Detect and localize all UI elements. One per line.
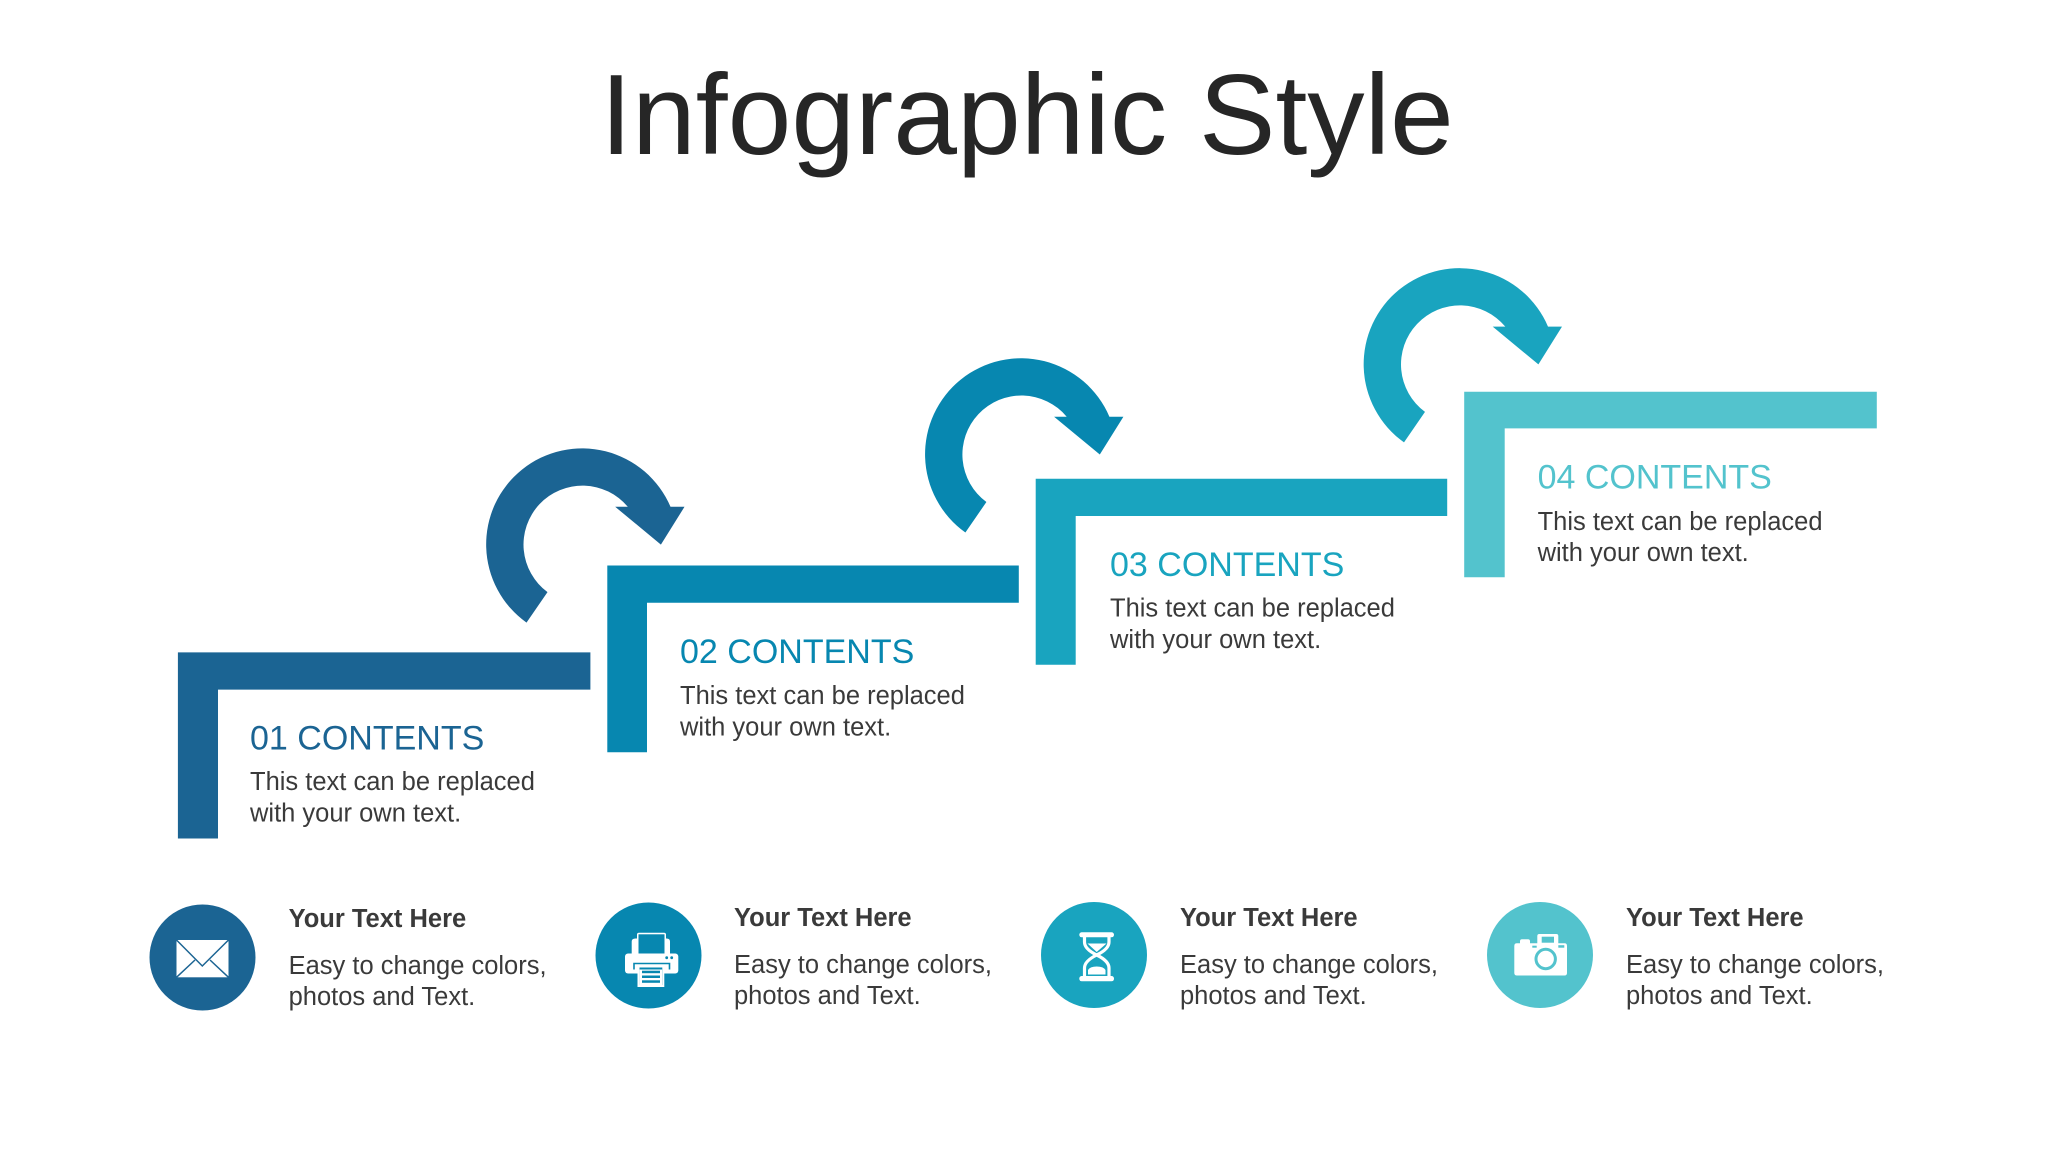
text block 4: This text can be replaced	[1538, 508, 1823, 536]
text block 3: with your own text.	[1109, 626, 1321, 654]
icon: printer badge	[596, 902, 702, 1008]
arrow 1	[486, 448, 684, 623]
bracket 2	[607, 566, 1019, 752]
text block 4: with your own text.	[1537, 539, 1749, 567]
arrow 2	[925, 358, 1123, 532]
info text 1: photos and Text.	[289, 983, 475, 1011]
bracket 4	[1464, 392, 1877, 577]
info block 1: Your Text Here	[289, 905, 466, 933]
icon: camera badge	[1487, 902, 1593, 1008]
step 2: bracket, heading and text	[607, 566, 1019, 752]
info block 2: Your Text Here	[734, 904, 912, 932]
heading 2: 02 CONTENTS	[680, 633, 914, 671]
info text 3: Easy to change colors,	[1180, 951, 1438, 979]
arrow 3	[1364, 268, 1562, 442]
bracket 1	[178, 652, 590, 838]
info text 2: photos and Text.	[734, 982, 921, 1010]
info text 4: photos and Text.	[1626, 982, 1813, 1010]
heading 4: 04 CONTENTS	[1538, 458, 1772, 496]
text block 1: with your own text.	[249, 800, 461, 828]
step 1: bracket, heading and text	[178, 652, 590, 838]
info text 3: photos and Text.	[1180, 982, 1367, 1010]
heading 3: 03 CONTENTS	[1110, 546, 1344, 584]
heading 1: 01 CONTENTS	[250, 720, 484, 758]
step 4: bracket, heading and text	[1464, 392, 1877, 577]
text block 2: with your own text.	[679, 713, 891, 741]
info text 4: Easy to change colors,	[1626, 951, 1884, 979]
info text 1: Easy to change colors,	[289, 952, 547, 980]
text block 1: This text can be replaced	[250, 768, 535, 796]
text block 2: This text can be replaced	[680, 682, 965, 710]
text block 3: This text can be replaced	[1110, 594, 1395, 622]
icon: hourglass badge	[1041, 902, 1147, 1008]
icon: envelope badge	[150, 904, 256, 1010]
bracket 3	[1036, 479, 1447, 665]
step 3: bracket, heading and text	[1036, 479, 1447, 665]
info text 2: Easy to change colors,	[734, 951, 992, 979]
info block 4: Your Text Here	[1626, 904, 1804, 932]
title: Infographic Style	[600, 51, 1454, 179]
info block 3: Your Text Here	[1180, 904, 1358, 932]
